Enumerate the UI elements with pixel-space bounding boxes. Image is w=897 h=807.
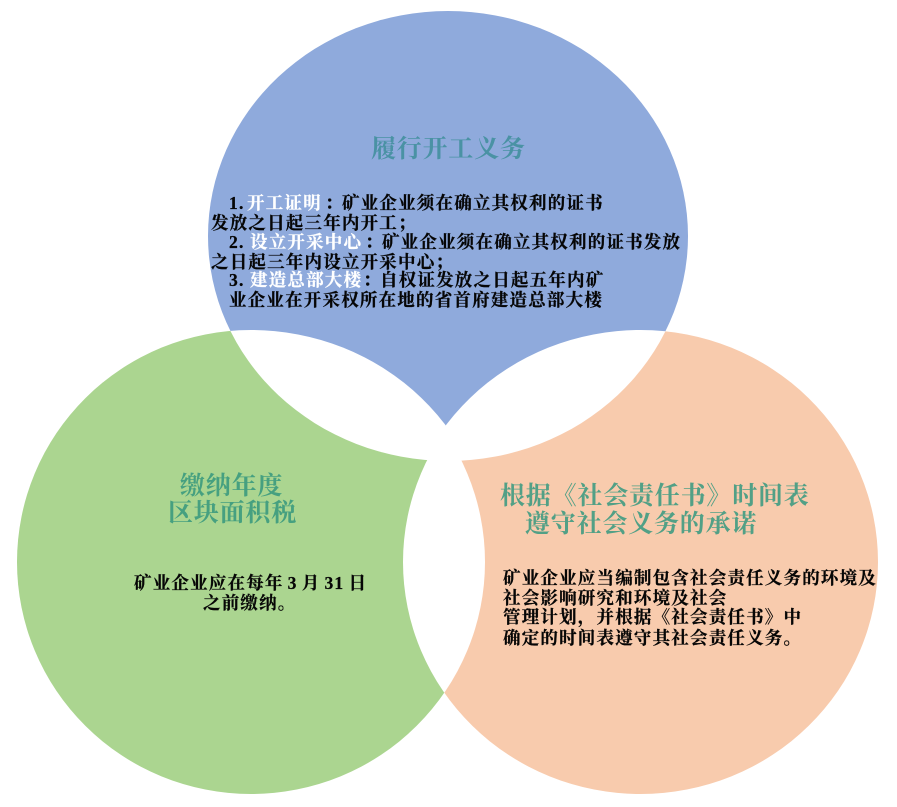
panel: green circle, block area tax <box>17 330 485 794</box>
green heading <box>168 471 297 527</box>
blue body text: 2. <box>229 232 245 252</box>
green body text <box>134 573 367 613</box>
peach heading: 根据《社会责任书》时间表 <box>500 482 810 510</box>
blue body text: 发放之日起三年内开工； <box>211 213 417 233</box>
blue body text: 1. <box>229 193 245 213</box>
green body text: 之前缴纳。 <box>203 593 296 613</box>
blue body text <box>211 193 681 310</box>
green heading: 区块面积税 <box>168 499 297 527</box>
peach heading <box>500 482 810 538</box>
green body text: 矿业企业应在每年 3 月 31 日 <box>134 573 367 593</box>
panel: blue circle, commencement duties <box>208 11 688 461</box>
blue body text: 自权证发放之日起五年内矿 <box>380 270 604 290</box>
peach body text: 社会影响研究和环境及社会 <box>503 588 727 608</box>
peach body text: 矿业企业应当编制包含社会责任义务的环境及 <box>503 568 877 588</box>
blue body text: 3. <box>229 270 245 290</box>
green circle shape <box>17 330 485 794</box>
blue heading: 履行开工义务 <box>371 135 526 163</box>
blue body text: 建造总部大楼 <box>250 270 362 290</box>
blue circle shape <box>208 11 688 461</box>
blue body text: 开工证明 <box>247 193 322 213</box>
blue body text: ： <box>363 270 382 290</box>
panel: peach circle, social responsibility <box>403 330 878 794</box>
green heading: 缴纳年度 <box>180 471 283 500</box>
peach body text: 确定的时间表遵守其社会责任义务。 <box>503 628 802 648</box>
blue body text: 业企业在开采权所在地的省首府建造总部大楼 <box>229 290 603 310</box>
peach circle shape <box>403 330 878 794</box>
blue body text: 设立开采中心 <box>250 232 363 252</box>
blue body text: ： <box>325 193 344 213</box>
blue body text: ： <box>365 232 384 252</box>
peach body text: 管理计划，并根据《社会责任书》中 <box>503 607 802 628</box>
blue body text: 矿业企业须在确立其权利的证书 <box>342 193 604 213</box>
peach heading: 遵守社会义务的承诺 <box>525 510 757 538</box>
blue body text: 之日起三年内设立开采中心； <box>211 252 454 272</box>
peach body text <box>503 568 877 648</box>
blue body text: 矿业企业须在确立其权利的证书发放 <box>382 232 681 252</box>
